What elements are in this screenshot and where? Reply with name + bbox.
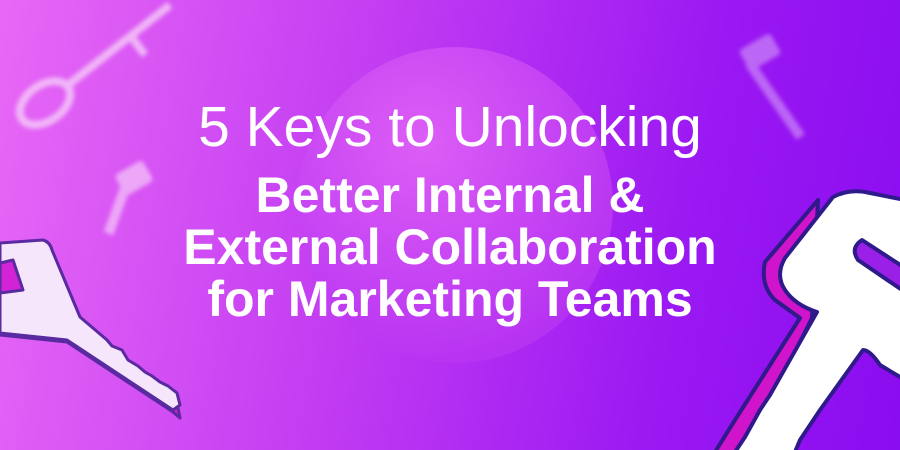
title lines 2-4: External Collaboration <box>183 219 717 275</box>
title lines 2-4: for Marketing Teams <box>207 271 693 327</box>
right big key <box>715 191 900 450</box>
blurred key top-right <box>738 33 805 140</box>
title lines 2-4: Better Internal & <box>256 167 644 223</box>
left big key <box>0 240 180 418</box>
center circle <box>297 47 613 363</box>
blurred key top-left <box>12 5 170 134</box>
title lines 2-4 <box>183 167 717 327</box>
title line 1: 5 Keys to Unlocking <box>198 95 702 159</box>
blurred small key <box>104 160 154 235</box>
